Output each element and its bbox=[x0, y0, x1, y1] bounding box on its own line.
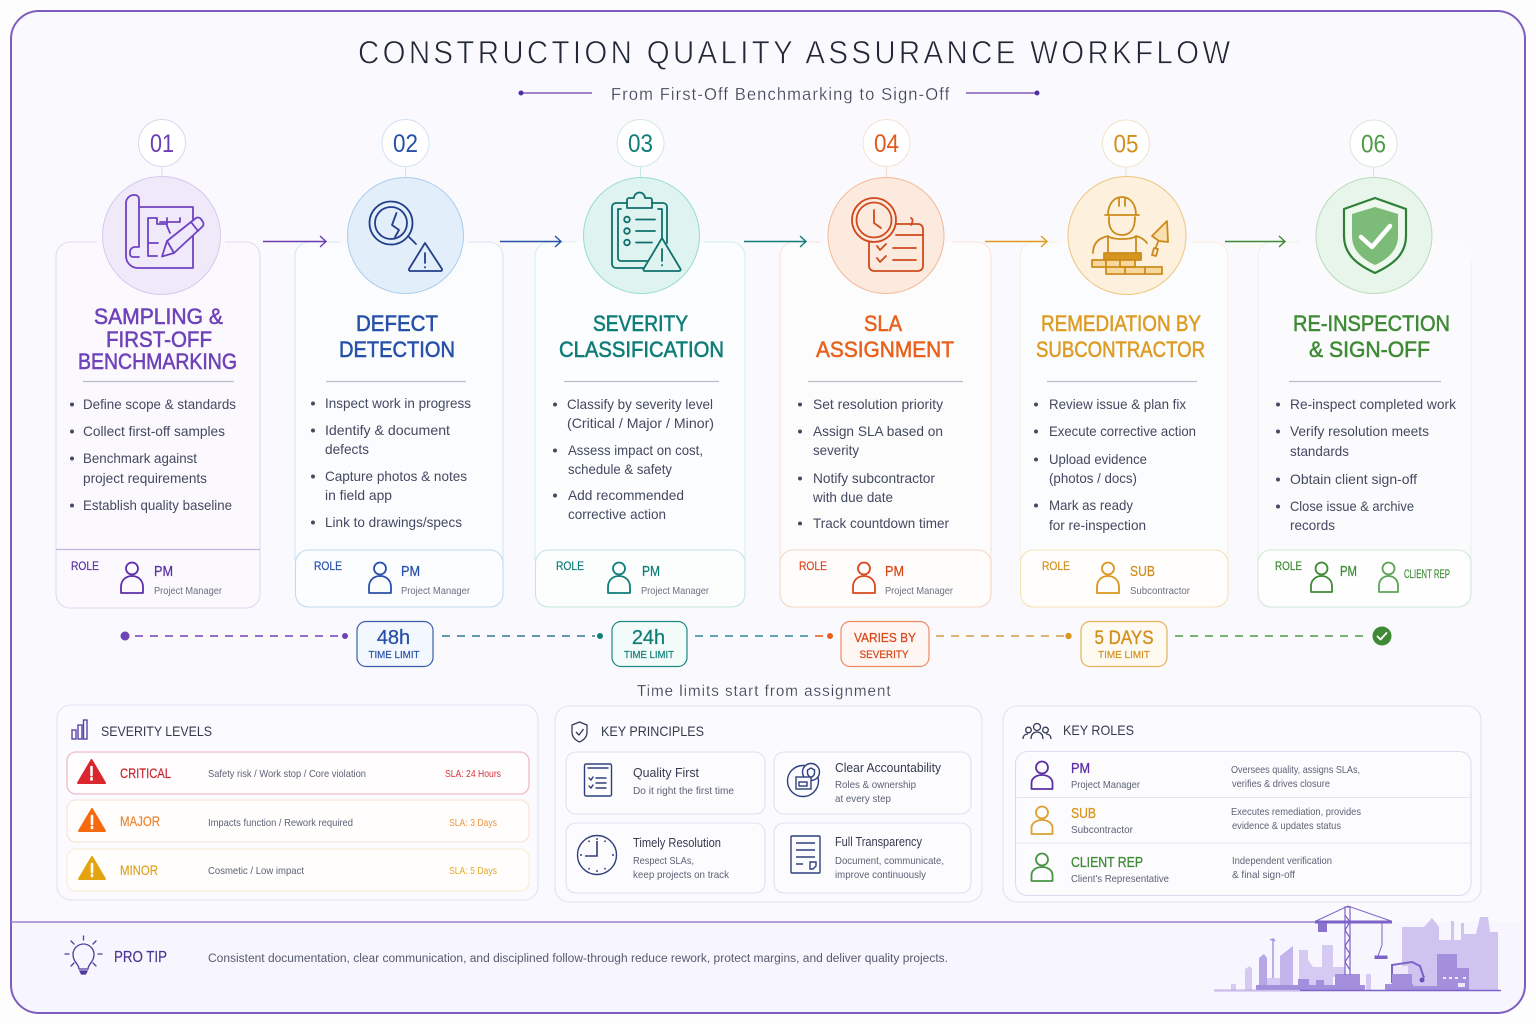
bullets: Track countdown timer bbox=[813, 515, 949, 531]
number: 05 bbox=[1114, 130, 1138, 158]
card: timely resolution: keep projects on track bbox=[633, 869, 730, 881]
heading: SLA bbox=[864, 311, 902, 336]
card bbox=[1258, 242, 1471, 607]
timeline bbox=[120, 622, 1392, 666]
number bbox=[1350, 120, 1397, 177]
panel heading: KEY PRINCIPLES bbox=[601, 723, 704, 739]
card bbox=[295, 242, 503, 607]
bullets bbox=[798, 396, 949, 531]
bullets: Collect first-off samples bbox=[83, 423, 225, 439]
role: client rep: Independent verification bbox=[1232, 855, 1332, 867]
role: PM: Project Manager bbox=[1071, 779, 1140, 791]
pro tip bbox=[65, 936, 948, 974]
role: Project Manager bbox=[885, 585, 953, 597]
card: full transparency: Full Transparency bbox=[835, 834, 922, 849]
role: ROLE bbox=[1042, 559, 1070, 573]
badge: 5 days: TIME LIMIT bbox=[1098, 649, 1151, 661]
number bbox=[138, 120, 186, 177]
card bbox=[56, 242, 260, 608]
timeline note: Time limits start from assignment bbox=[637, 683, 891, 700]
bullets: Identify & document bbox=[325, 422, 450, 438]
role bbox=[1275, 559, 1450, 592]
bullets: Benchmark against bbox=[83, 450, 197, 466]
row: minor: SLA: 5 Days bbox=[449, 865, 497, 877]
role: ROLE bbox=[1275, 559, 1302, 573]
bullets: Upload evidence bbox=[1049, 451, 1147, 467]
heading: SEVERITY bbox=[593, 311, 688, 336]
bullets: in field app bbox=[325, 487, 392, 503]
role: PM: PM bbox=[1071, 761, 1090, 777]
panel: severity levels bbox=[57, 705, 538, 900]
role: Project Manager bbox=[154, 585, 222, 597]
roles table bbox=[1016, 752, 1471, 896]
badge: 24h bbox=[612, 622, 687, 666]
panel icon: shield bbox=[572, 722, 587, 742]
bullets: Classify by severity level bbox=[567, 396, 713, 412]
card: quality first: Quality First bbox=[633, 765, 699, 780]
role: PM: Oversees quality, assigns SLAs, bbox=[1231, 764, 1360, 776]
card: clear accountability bbox=[774, 752, 971, 814]
row: major bbox=[67, 800, 529, 842]
heading bbox=[816, 311, 954, 362]
role bbox=[1042, 559, 1190, 597]
icon: worker laying bricks bbox=[1068, 176, 1186, 294]
panel icon: people bbox=[1023, 724, 1051, 739]
row: minor bbox=[67, 849, 529, 891]
panel: key roles bbox=[1003, 706, 1481, 902]
step 04: SLA assignment bbox=[780, 120, 991, 607]
heading: SAMPLING & bbox=[94, 304, 223, 329]
arrow: step 1 to 2 bbox=[263, 236, 326, 247]
bullets: Mark as ready bbox=[1049, 497, 1133, 513]
panel icon: bars bbox=[72, 720, 87, 739]
card bbox=[535, 242, 745, 607]
icon: clipboard and warning bbox=[584, 178, 700, 294]
title: CONSTRUCTION QUALITY ASSURANCE WORKFLOW bbox=[358, 34, 1230, 71]
heading bbox=[1293, 311, 1450, 362]
row: minor: MINOR bbox=[120, 862, 158, 878]
icon: magnifier and warning bbox=[348, 178, 464, 294]
subtitle bbox=[518, 85, 1040, 104]
badge: 5 days: 5 DAYS bbox=[1094, 628, 1154, 649]
bullets: Assess impact on cost, bbox=[568, 442, 703, 458]
heading: REMEDIATION BY bbox=[1041, 311, 1201, 336]
row: major: Impacts function / Rework required bbox=[208, 817, 353, 829]
bullets: standards bbox=[1290, 443, 1349, 459]
card: clear accountability: at every step bbox=[835, 793, 891, 805]
role: PM bbox=[885, 564, 904, 580]
ground structures bbox=[1256, 954, 1469, 991]
card: clear accountability: Clear Accountability bbox=[835, 760, 941, 775]
role: PM bbox=[1340, 564, 1357, 580]
badge: varies by severity bbox=[841, 622, 929, 666]
role: Project Manager bbox=[401, 585, 470, 597]
role bbox=[314, 559, 470, 597]
bullets: with due date bbox=[812, 489, 893, 505]
excavator bbox=[1392, 962, 1424, 984]
badge: 5 days bbox=[1081, 622, 1167, 666]
role: PM bbox=[642, 564, 660, 580]
role: SUB: evidence & updates status bbox=[1232, 820, 1341, 832]
end check bbox=[1372, 626, 1392, 646]
heading: ASSIGNMENT bbox=[816, 337, 954, 362]
bullets: Set resolution priority bbox=[813, 396, 943, 412]
row: critical bbox=[67, 752, 529, 794]
heading: FIRST-OFF bbox=[106, 327, 212, 352]
role: SUB: Subcontractor bbox=[1071, 824, 1133, 836]
arrow: step 2 to 3 bbox=[500, 236, 561, 247]
card: full transparency bbox=[774, 823, 971, 893]
crane bbox=[1315, 906, 1392, 975]
number: 04 bbox=[874, 130, 899, 158]
bullets: Review issue & plan fix bbox=[1049, 396, 1186, 412]
number bbox=[863, 120, 910, 177]
heading: SUBCONTRACTOR bbox=[1036, 337, 1205, 362]
row: minor: Cosmetic / Low impact bbox=[208, 865, 304, 877]
number: 06 bbox=[1361, 130, 1386, 158]
row: critical: Safety risk / Work stop / Core violation bbox=[208, 768, 366, 780]
segment 3 bbox=[695, 633, 833, 639]
illustration: construction skyline bbox=[1214, 906, 1501, 991]
role: ROLE bbox=[71, 559, 99, 573]
card bbox=[1020, 242, 1228, 607]
arrow: step 5 to 6 bbox=[1225, 236, 1285, 247]
card: full transparency: Document, communicate, bbox=[835, 855, 944, 867]
segment 5 bbox=[1175, 635, 1368, 637]
bullets: Obtain client sign-off bbox=[1290, 471, 1417, 487]
number bbox=[382, 120, 429, 177]
bullets: Assign SLA based on bbox=[813, 423, 943, 439]
bullets: Verify resolution meets bbox=[1290, 423, 1429, 439]
number bbox=[617, 120, 664, 177]
role: PM bbox=[1032, 761, 1360, 791]
panel heading: SEVERITY LEVELS bbox=[101, 723, 212, 739]
role bbox=[556, 559, 709, 597]
card: clear accountability: Roles & ownership bbox=[835, 779, 916, 791]
badge: varies by severity: VARIES BY bbox=[854, 630, 916, 645]
role: client rep bbox=[1032, 854, 1332, 885]
role: ROLE bbox=[799, 559, 827, 573]
heading: BENCHMARKING bbox=[78, 349, 237, 374]
badge: 24h: TIME LIMIT bbox=[624, 649, 675, 661]
card bbox=[780, 242, 991, 607]
role: CLIENT REP bbox=[1404, 569, 1450, 581]
bullets: (photos / docs) bbox=[1049, 470, 1137, 486]
bullets bbox=[553, 396, 714, 522]
card: quality first: Do it right the first time bbox=[633, 785, 734, 797]
pole bbox=[1270, 939, 1275, 978]
role: PM: verifies & drives closure bbox=[1232, 778, 1330, 790]
role: client rep: & final sign-off bbox=[1232, 869, 1295, 881]
bullets bbox=[1276, 396, 1457, 533]
role: SUB bbox=[1130, 564, 1155, 580]
role: Subcontractor bbox=[1130, 585, 1190, 597]
label: PRO TIP bbox=[114, 949, 167, 966]
bullets: Execute corrective action bbox=[1049, 423, 1196, 439]
badge: 24h: 24h bbox=[632, 627, 665, 649]
bullets bbox=[70, 396, 236, 513]
badge: 48h: 48h bbox=[377, 627, 410, 649]
start segment bbox=[120, 632, 348, 640]
row: major: SLA: 3 Days bbox=[449, 817, 497, 829]
far city bbox=[1402, 917, 1498, 990]
panel: key principles bbox=[555, 706, 982, 902]
heading bbox=[1036, 311, 1205, 362]
role: SUB bbox=[1032, 806, 1361, 836]
bullets: Capture photos & notes bbox=[325, 468, 467, 484]
row: major: MAJOR bbox=[120, 813, 160, 829]
card: timely resolution bbox=[566, 823, 765, 893]
row: critical: SLA: 24 Hours bbox=[445, 768, 501, 780]
bullets: Add recommended bbox=[568, 487, 684, 503]
bullets: Re-inspect completed work bbox=[1290, 396, 1457, 412]
role: PM bbox=[401, 564, 420, 580]
bullets: for re-inspection bbox=[1049, 517, 1146, 533]
arrow: step 4 to 5 bbox=[985, 236, 1047, 247]
heading: CLASSIFICATION bbox=[559, 337, 724, 362]
icon: light bulb bbox=[65, 936, 102, 974]
role: Project Manager bbox=[641, 585, 709, 597]
step 06: re-inspection and sign-off bbox=[1258, 120, 1471, 607]
heading: DEFECT bbox=[356, 311, 438, 336]
badge: 48h bbox=[357, 622, 433, 666]
number bbox=[1102, 120, 1150, 177]
bullets: project requirements bbox=[83, 470, 207, 486]
role: PM bbox=[154, 564, 173, 580]
bullets: corrective action bbox=[568, 506, 666, 522]
step 02: defect detection bbox=[295, 120, 503, 607]
icon: blueprint and pencil bbox=[102, 176, 220, 294]
row: critical: CRITICAL bbox=[120, 765, 171, 781]
role bbox=[799, 559, 953, 597]
role: SUB: Executes remediation, provides bbox=[1231, 806, 1361, 818]
badge: varies by severity: SEVERITY bbox=[860, 649, 909, 661]
building windows bbox=[1443, 977, 1466, 987]
step 03: severity classification bbox=[535, 120, 745, 607]
bullets: defects bbox=[325, 441, 369, 457]
icon: clock and calendar bbox=[828, 178, 944, 294]
ground line bbox=[1214, 990, 1501, 992]
role: SUB: SUB bbox=[1071, 806, 1096, 822]
role: client rep: CLIENT REP bbox=[1071, 855, 1143, 871]
bullets: Close issue & archive bbox=[1290, 498, 1414, 514]
arrow: step 3 to 4 bbox=[744, 236, 806, 247]
role bbox=[71, 559, 222, 597]
near city bbox=[1231, 945, 1371, 990]
step 01: sampling and first-off benchmarking bbox=[56, 120, 260, 608]
badge: 48h: TIME LIMIT bbox=[368, 649, 420, 661]
bullets: Notify subcontractor bbox=[813, 470, 935, 486]
heading bbox=[78, 304, 237, 374]
step 05: remediation by subcontractor bbox=[1020, 120, 1228, 607]
icon: shield with check bbox=[1316, 178, 1432, 294]
bullets bbox=[311, 395, 471, 530]
bullets: records bbox=[1290, 517, 1335, 533]
role: client rep: Client's Representative bbox=[1071, 873, 1169, 885]
bullets bbox=[1034, 396, 1196, 533]
card: quality first bbox=[566, 752, 765, 814]
heading: & SIGN-OFF bbox=[1309, 337, 1430, 362]
number: 01 bbox=[150, 130, 174, 158]
card: timely resolution: Timely Resolution bbox=[633, 835, 721, 850]
bullets: Define scope & standards bbox=[83, 396, 236, 412]
bullets: Inspect work in progress bbox=[325, 395, 471, 411]
segment 2 bbox=[442, 633, 603, 639]
panel heading: KEY ROLES bbox=[1063, 722, 1134, 738]
heading bbox=[559, 311, 724, 362]
heading: DETECTION bbox=[339, 337, 455, 362]
bullets: (Critical / Major / Minor) bbox=[567, 415, 714, 431]
number: 03 bbox=[628, 130, 653, 158]
bullets: Establish quality baseline bbox=[83, 497, 232, 513]
bullets: Link to drawings/specs bbox=[325, 514, 462, 530]
bullets: severity bbox=[813, 442, 859, 458]
heading bbox=[339, 311, 455, 362]
role: ROLE bbox=[556, 559, 584, 573]
card: full transparency: improve continuously bbox=[835, 869, 927, 881]
card: timely resolution: Respect SLAs, bbox=[633, 855, 694, 867]
subtitle: From First-Off Benchmarking to Sign-Off bbox=[611, 85, 949, 104]
segment 4 bbox=[936, 633, 1072, 639]
heading: RE-INSPECTION bbox=[1293, 311, 1450, 336]
bullets: schedule & safety bbox=[568, 461, 672, 477]
role: ROLE bbox=[314, 559, 342, 573]
text: Consistent documentation, clear communication, and disciplined follow-through reduce rework, protect margins, and deliver quality projects. bbox=[208, 953, 948, 965]
number: 02 bbox=[393, 130, 418, 158]
